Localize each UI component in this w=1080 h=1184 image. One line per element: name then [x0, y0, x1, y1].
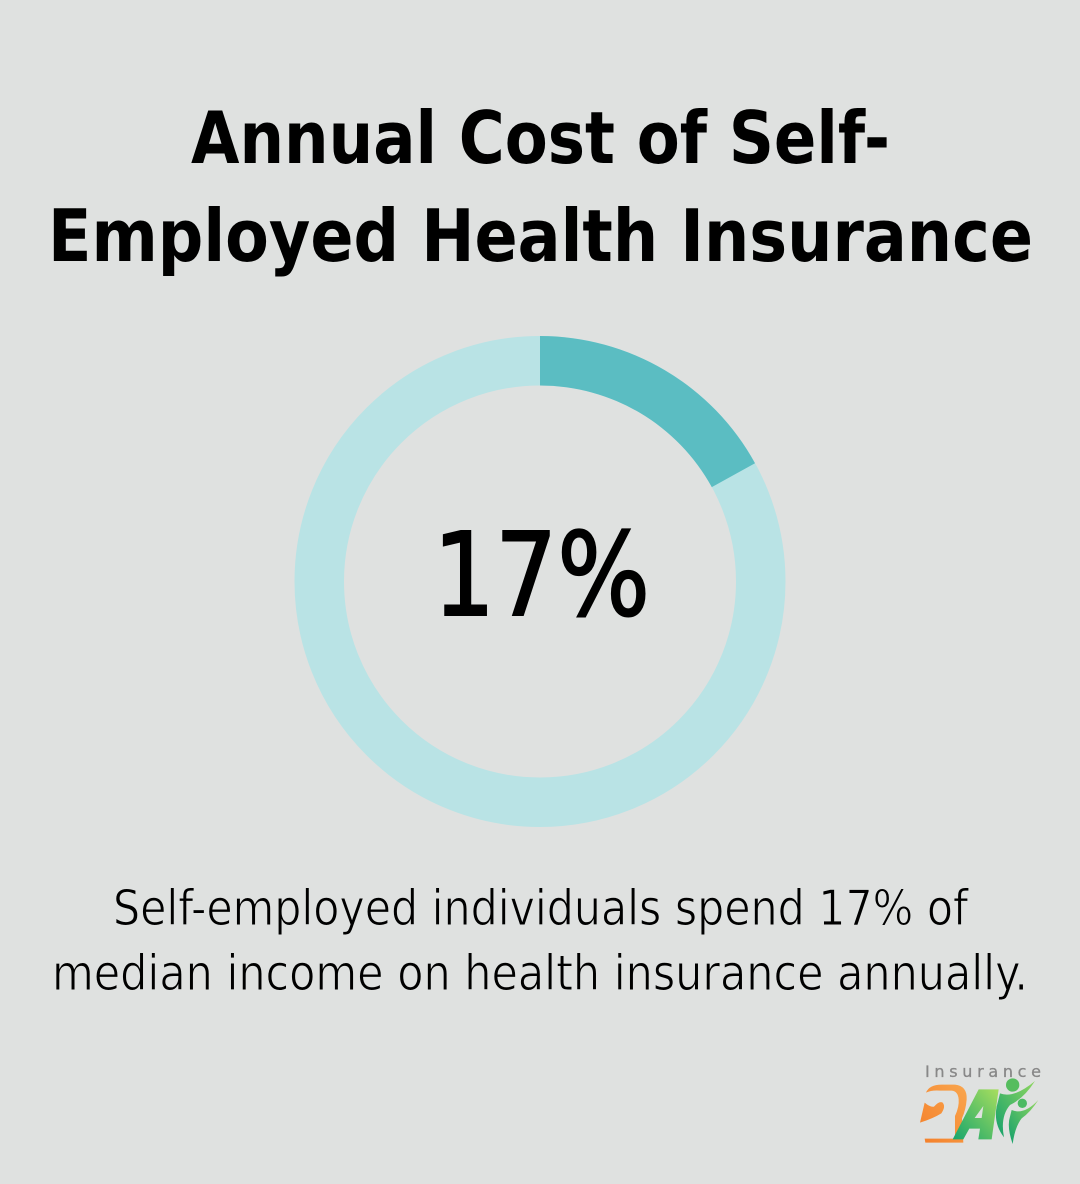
highlighted segment	[540, 336, 755, 487]
central percentage: 17%	[433, 509, 650, 643]
logo numeral 2 with heart	[920, 1085, 967, 1143]
logo figures	[996, 1078, 1038, 1144]
donut chart: 17%	[319, 336, 761, 802]
logo wordmark: Insurance	[925, 1062, 1041, 1081]
title: Annual Cost of Self-	[191, 96, 890, 180]
logo: Insurance 2A	[920, 1062, 1041, 1144]
description text	[52, 880, 1028, 1002]
title	[48, 96, 1033, 278]
description text: Self-employed individuals spend 17% of	[113, 880, 970, 937]
logo letter A	[953, 1089, 999, 1139]
